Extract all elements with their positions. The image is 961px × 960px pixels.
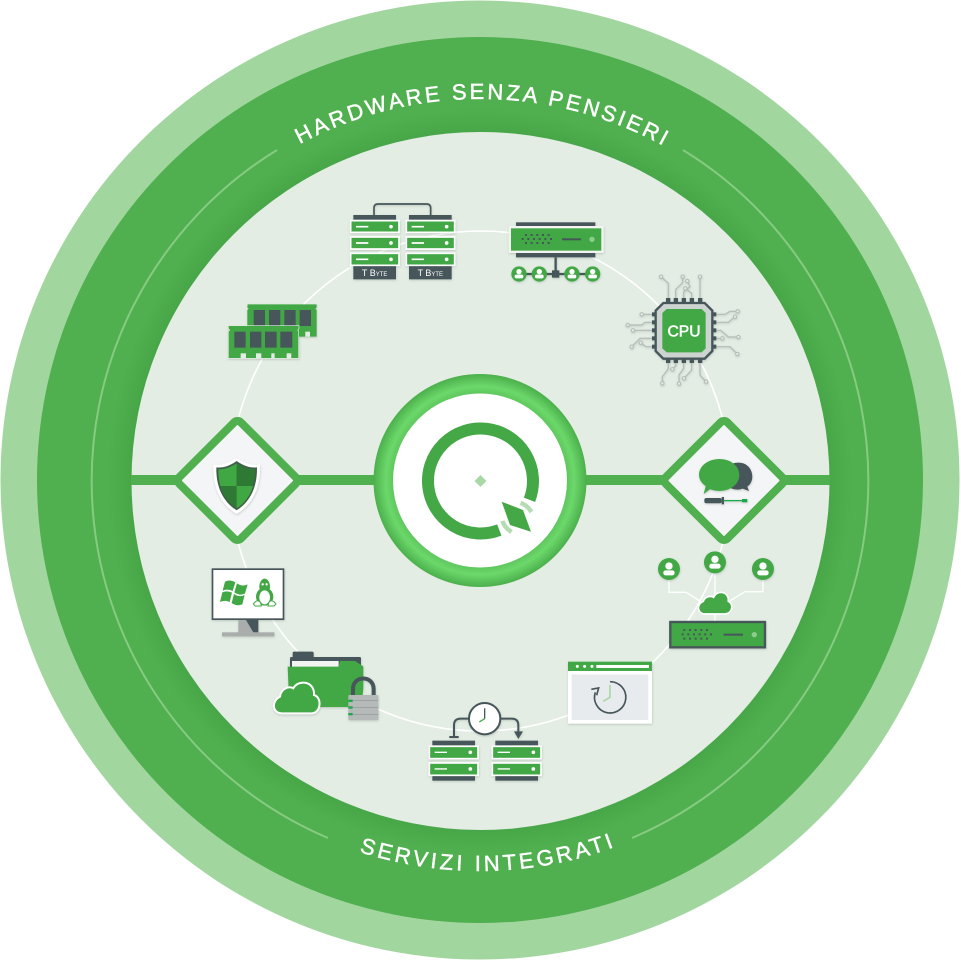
logo centre dot bbox=[474, 475, 486, 487]
hub ring bbox=[374, 374, 586, 587]
chip body bbox=[656, 303, 712, 359]
logo pointer bbox=[502, 502, 531, 532]
user badges bbox=[511, 266, 600, 282]
icon: cloud server with users bbox=[658, 551, 774, 647]
Linux penguin bbox=[253, 579, 276, 606]
server unit bbox=[670, 622, 765, 647]
folder bbox=[288, 652, 363, 707]
padlock bbox=[348, 678, 378, 720]
left diamond with shield bbox=[176, 419, 299, 542]
user badge centre bbox=[704, 551, 726, 573]
horizontal band bbox=[131, 475, 830, 485]
heading: hardware senza pensieri: HARDWARE SENZA PENSIERI bbox=[294, 84, 669, 145]
white orbit line bbox=[230, 231, 730, 731]
user badge right bbox=[752, 558, 774, 580]
thin ring line: right arc bbox=[632, 150, 868, 838]
chip traces bbox=[628, 277, 738, 384]
clock bbox=[469, 703, 500, 734]
backup connector bbox=[449, 719, 518, 737]
chip core bbox=[662, 309, 706, 352]
diamond frame bbox=[176, 419, 299, 542]
icon: scheduled backup between servers bbox=[429, 703, 541, 781]
back RAM stick bbox=[247, 304, 317, 337]
diamond frame bbox=[662, 419, 786, 542]
thin ring line: left arc bbox=[92, 150, 328, 838]
cloud bbox=[698, 592, 732, 614]
icon: chat bubbles and screwdriver bbox=[699, 459, 752, 504]
left server bbox=[429, 741, 478, 781]
logo end caps bbox=[502, 503, 532, 532]
icon: RAM modules bbox=[228, 304, 317, 359]
icon: restore window with clock bbox=[568, 662, 652, 724]
connecting lines bbox=[669, 570, 763, 622]
cloud bbox=[274, 683, 320, 713]
right diamond with support chat bbox=[662, 419, 786, 542]
icon: shield bbox=[213, 458, 260, 514]
heading: servizi integrati: SERVIZI INTEGRATI bbox=[360, 833, 612, 872]
inner disc bbox=[132, 132, 830, 830]
CPU label: CPU bbox=[667, 323, 701, 340]
icon: monitor with Windows and Linux bbox=[212, 569, 283, 636]
connector arrowhead bbox=[514, 731, 523, 739]
hub white core bbox=[393, 394, 567, 568]
central logo hub bbox=[374, 374, 586, 587]
icon: CPU chip bbox=[626, 275, 740, 385]
chip pins bbox=[652, 298, 716, 363]
front RAM stick bbox=[228, 326, 299, 359]
user badge left bbox=[658, 558, 680, 580]
right server bbox=[492, 741, 541, 781]
Windows logo bbox=[220, 580, 248, 605]
left server stack: T Byte bbox=[362, 268, 387, 278]
logo ring bbox=[428, 428, 533, 533]
icon: network switch with users bbox=[509, 222, 604, 282]
icon: clustered servers T Byte bbox=[351, 204, 455, 279]
right server stack: T Byte bbox=[418, 268, 443, 278]
icon: cloud folder with padlock bbox=[274, 652, 378, 720]
